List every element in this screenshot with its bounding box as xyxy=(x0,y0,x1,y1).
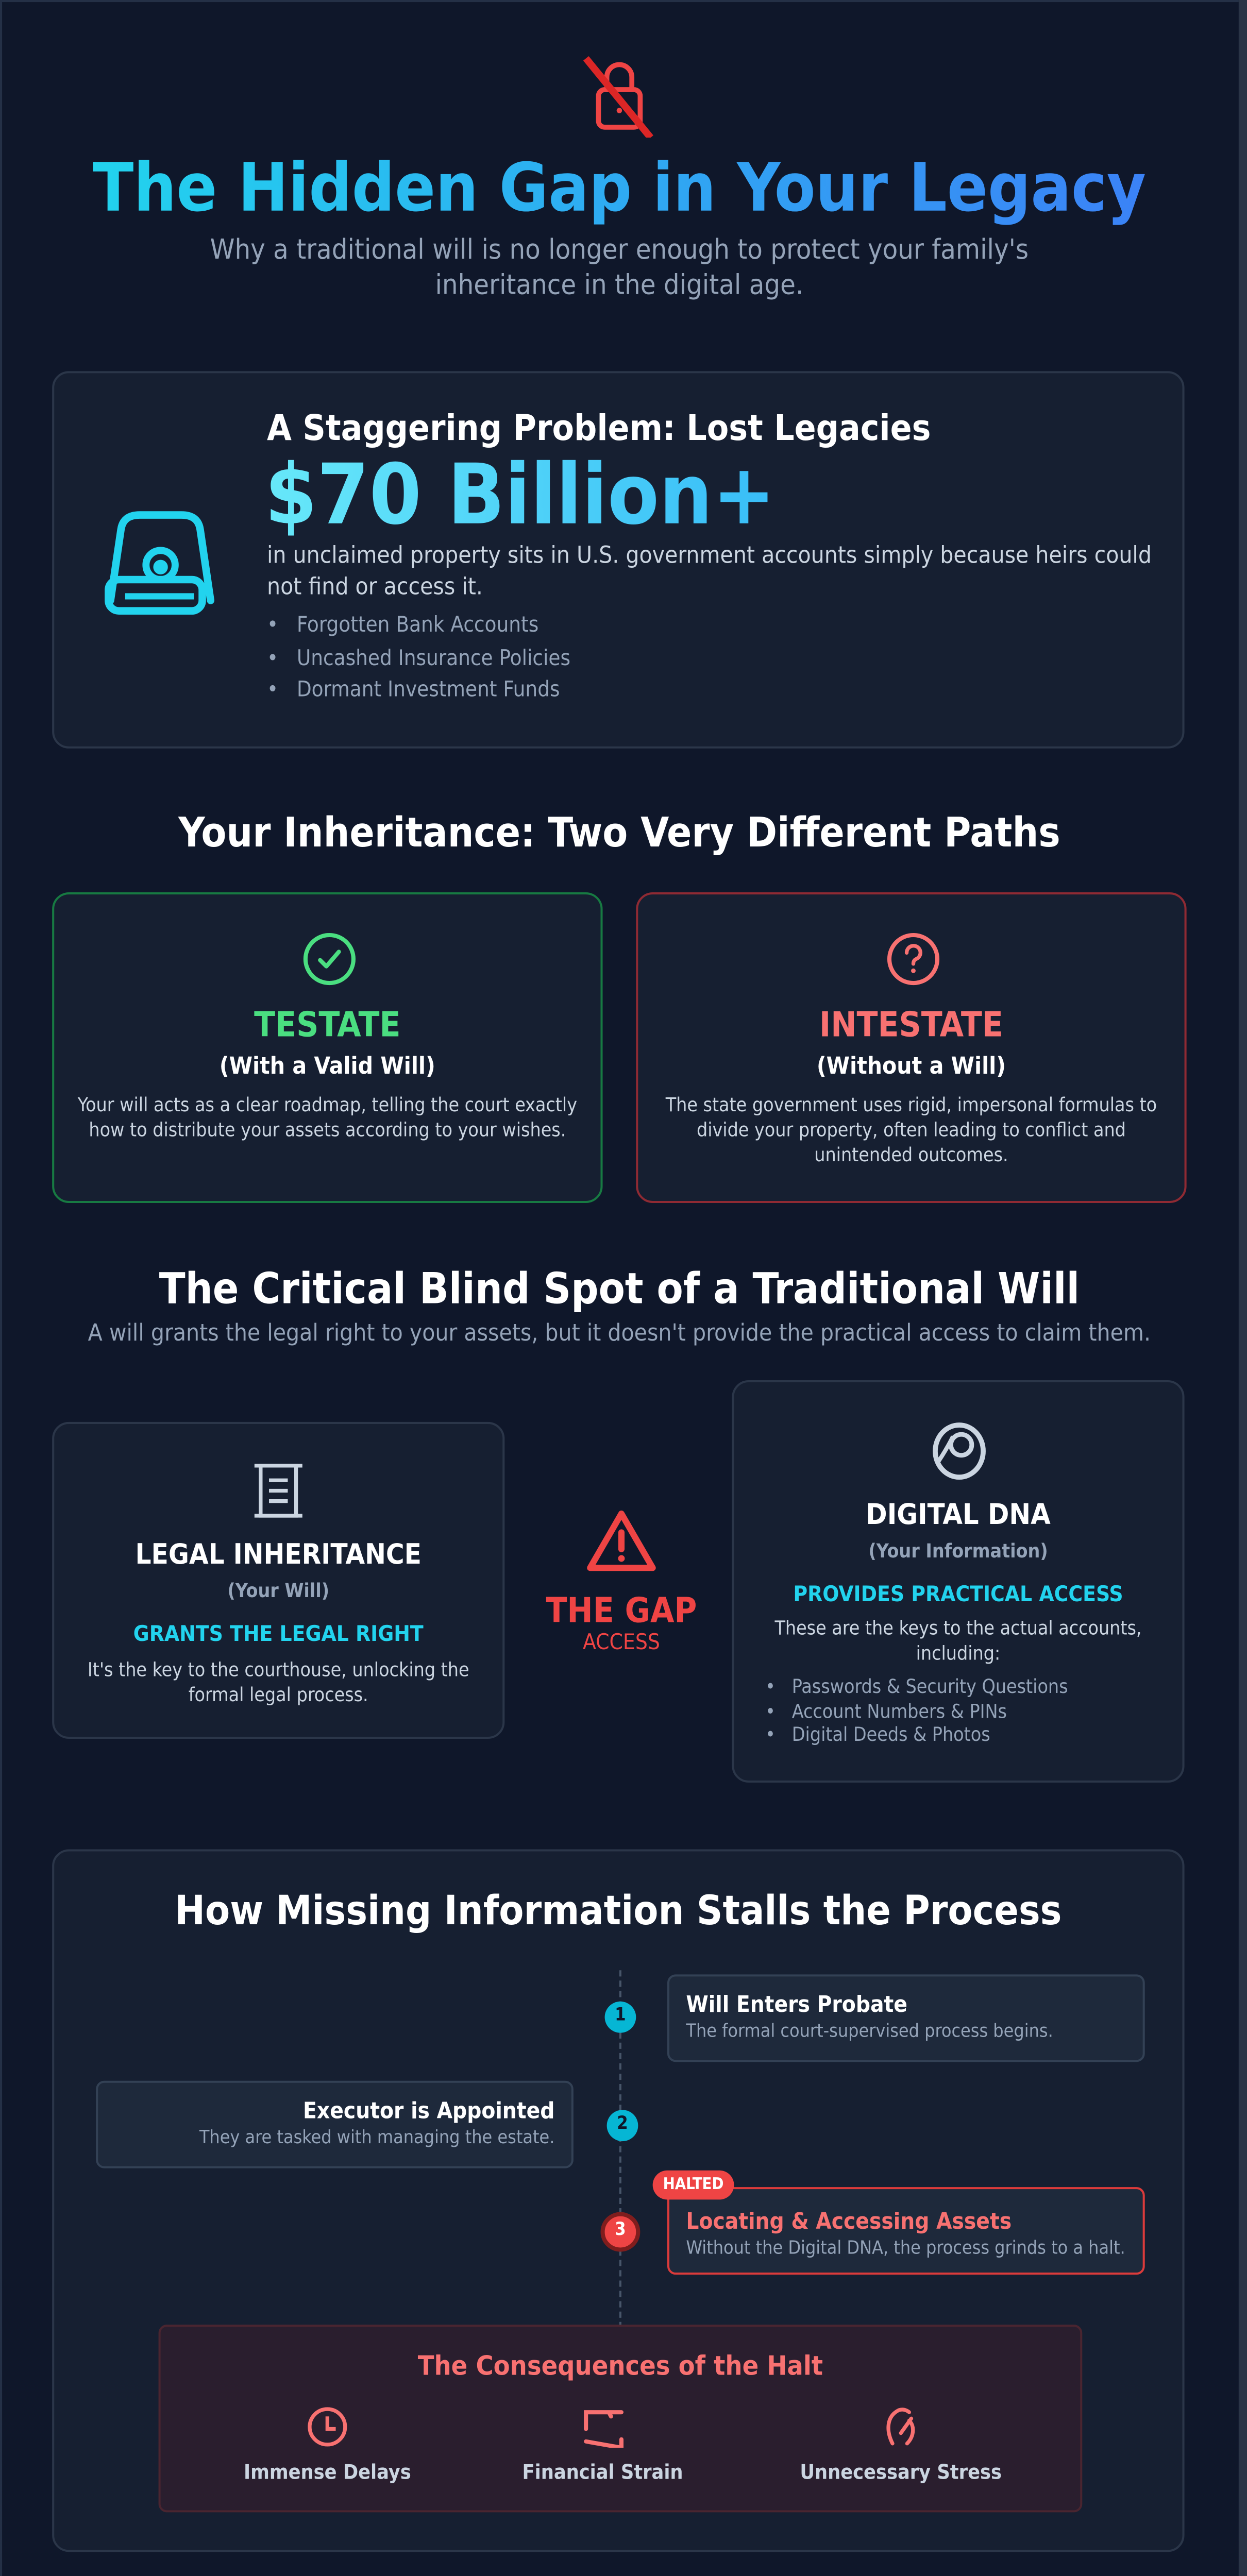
heading: blind spot: The Critical Blind Spot of a Traditional Will xyxy=(159,1263,1080,1313)
item: delays: Immense Delays xyxy=(244,2462,411,2485)
step 3 halted xyxy=(600,2212,640,2252)
panel: consequences xyxy=(159,2325,1082,2512)
description: in unclaimed property sits in U.S. government accounts simply because heirs could not find or access it. xyxy=(267,542,1152,600)
icon: fingerprint xyxy=(933,1422,986,1480)
panel: intestate: (Without a Will) xyxy=(817,1053,1006,1080)
panel: legal inheritance: It's the key to the courthouse, unlocking the formal legal process. xyxy=(88,1659,469,1707)
bullet list: • Dormant Investment Funds xyxy=(267,678,560,703)
panel: digital dna: • Account Numbers & PINs xyxy=(765,1701,1007,1723)
subtitle: Why a traditional will is no longer enough to protect your family's xyxy=(210,235,1029,267)
panel: consequences: The Consequences of the Halt xyxy=(418,2352,823,2383)
panel: digital dna: PROVIDES PRACTICAL ACCESS xyxy=(793,1583,1123,1607)
item: delays xyxy=(244,2407,411,2485)
item: financial: Financial Strain xyxy=(523,2462,683,2485)
bullet list: • Forgotten Bank Accounts xyxy=(267,613,538,638)
title: The Hidden Gap in Your Legacy xyxy=(93,148,1146,227)
bullet list: • Uncashed Insurance Policies xyxy=(267,646,570,670)
panel: legal inheritance: LEGAL INHERITANCE xyxy=(135,1541,422,1572)
panel: legal inheritance xyxy=(52,1422,504,1739)
subheading: A will grants the legal right to your assets, but it doesn't provide the practical access to claim them. xyxy=(88,1320,1151,1347)
panel: digital dna: (Your Information) xyxy=(868,1541,1048,1564)
big stat: $70 Billion+ xyxy=(265,448,776,544)
panel: testate: TESTATE xyxy=(254,1005,401,1044)
step 1: 1 xyxy=(615,2006,626,2026)
icon: crossed lock xyxy=(583,56,653,138)
panel: legal inheritance: GRANTS THE LEGAL RIGHT xyxy=(133,1622,424,1647)
heading: How Missing Information Stalls the Process xyxy=(175,1887,1061,1935)
subtitle: inheritance in the digital age. xyxy=(435,271,803,302)
heading: two paths: Your Inheritance: Two Very Different Paths xyxy=(178,809,1060,857)
panel: testate xyxy=(52,892,603,1203)
step 2 xyxy=(607,2110,638,2141)
badge: halted: HALTED xyxy=(663,2175,723,2193)
panel: digital dna: DIGITAL DNA xyxy=(866,1499,1051,1532)
icon: check circle xyxy=(303,933,356,985)
panel: process: Without the Digital DNA, the process grinds to a halt. xyxy=(686,2239,1125,2260)
subtitle xyxy=(210,235,1029,302)
panel: process: They are tasked with managing the estate. xyxy=(199,2129,554,2149)
panel: intestate: INTESTATE xyxy=(819,1005,1003,1044)
panel: process: Executor is Appointed xyxy=(303,2097,554,2125)
callout: the gap: THE GAP xyxy=(546,1591,697,1631)
panel: intestate: The state government uses rigid, impersonal formulas to divide your property, often leading to conflict and unintended outcomes. xyxy=(666,1095,1157,1167)
panel: testate: Your will acts as a clear roadmap, telling the court exactly how to distribute your assets according to your wishes. xyxy=(78,1095,577,1143)
panel: digital dna xyxy=(732,1380,1185,1783)
panel: digital dna: • Digital Deeds & Photos xyxy=(765,1724,990,1748)
panel: lost legacies xyxy=(52,371,1185,749)
icon: document xyxy=(255,1464,302,1518)
bullet list xyxy=(267,613,570,703)
item: stress: Unnecessary Stress xyxy=(800,2462,1002,2485)
panel: digital dna: • Passwords & Security Questions xyxy=(765,1676,1068,1699)
step 3 halted: 3 xyxy=(615,2221,626,2241)
panel: process: Locating & Accessing Assets xyxy=(686,2208,1012,2235)
badge: halted xyxy=(653,2171,734,2199)
panel: process: Will Enters Probate xyxy=(686,1991,907,2018)
panel: testate: (With a Valid Will) xyxy=(220,1053,435,1080)
step 1 xyxy=(605,2002,636,2033)
icon: warning xyxy=(587,1511,656,1571)
panel: process xyxy=(52,1850,1185,2552)
step 2: 2 xyxy=(617,2114,628,2135)
heading: A Staggering Problem: Lost Legacies xyxy=(267,409,931,450)
panel: legal inheritance: (Your Will) xyxy=(227,1580,329,1603)
callout: the gap xyxy=(546,1511,697,1655)
icon: vault xyxy=(105,511,214,615)
icon: question circle xyxy=(887,933,940,985)
callout: the gap: ACCESS xyxy=(583,1631,660,1655)
panel: digital dna: These are the keys to the actual accounts, including: xyxy=(774,1618,1142,1666)
item: financial xyxy=(523,2410,683,2485)
item: stress xyxy=(800,2408,1002,2485)
panel: process: The formal court-supervised process begins. xyxy=(686,2022,1053,2043)
panel: intestate xyxy=(636,892,1187,1203)
